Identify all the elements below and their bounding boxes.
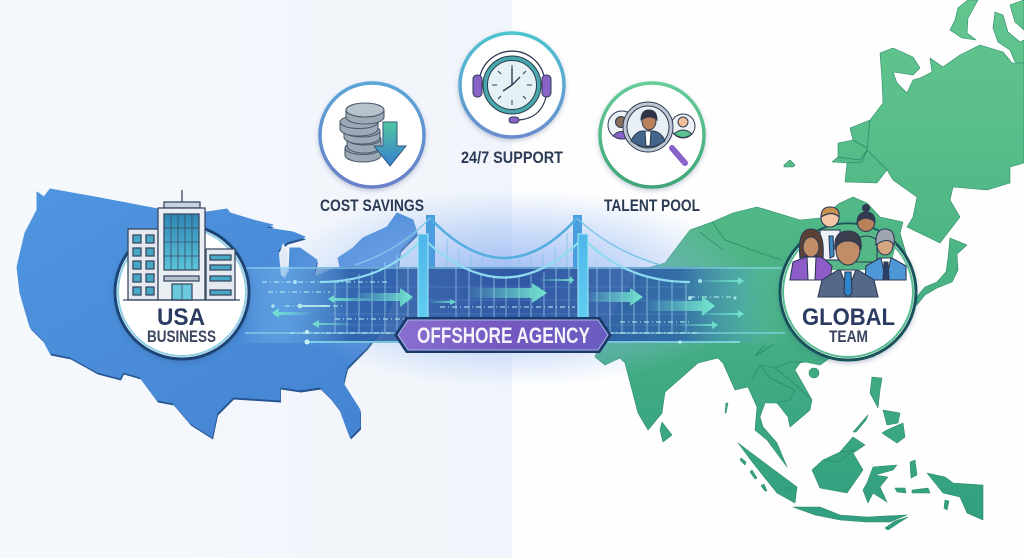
lake michigan — [279, 243, 288, 278]
icon: magnifier and candidates — [608, 102, 695, 163]
small islands — [895, 488, 906, 493]
front left person — [790, 229, 832, 280]
Java and lesser Sunda — [793, 507, 907, 522]
back towers and back cables — [355, 215, 660, 270]
Borneo — [812, 437, 865, 493]
Sulawesi — [863, 465, 897, 503]
front cables — [423, 238, 583, 278]
offshore agency badge — [394, 317, 612, 353]
label: business: BUSINESS — [147, 328, 216, 346]
Hainan — [809, 368, 819, 378]
Papua — [927, 473, 983, 520]
Sumatra — [738, 443, 797, 503]
back right person — [855, 204, 877, 262]
flow arrows left — [272, 295, 373, 328]
northern islands — [950, 0, 978, 40]
icon: team of people — [790, 204, 906, 297]
ring — [460, 33, 564, 137]
front towers — [418, 234, 428, 318]
badge circle — [115, 225, 249, 359]
panel: 24/7 support — [460, 33, 564, 167]
ring — [600, 83, 704, 187]
offshore agency badge: OFFSHORE AGENCY — [417, 323, 590, 348]
Sri Lanka — [660, 422, 672, 442]
label: 24/7 SUPPORT — [461, 149, 563, 167]
badge circle — [780, 224, 916, 360]
label: USA: USA — [157, 304, 205, 331]
ring — [320, 83, 424, 187]
band grid lines — [335, 247, 686, 333]
data dots — [271, 279, 736, 344]
label: COST SAVINGS — [320, 197, 424, 215]
right person — [865, 229, 906, 280]
panel: USA business badge — [115, 190, 249, 359]
map: USA — [17, 189, 418, 440]
panel: global team badge — [780, 204, 916, 360]
icon: office buildings — [123, 190, 240, 300]
dotted data streams — [262, 282, 735, 333]
Russia and Europe landmass — [832, 45, 1024, 243]
label: TALENT POOL — [604, 197, 700, 215]
Japan — [916, 238, 967, 305]
icon: coins and down arrow — [340, 103, 384, 162]
map: Asia — [595, 0, 1024, 530]
front center person — [818, 231, 878, 297]
flow arrows right — [357, 276, 744, 329]
glow behind bridge — [262, 188, 762, 388]
panel: talent pool — [600, 83, 704, 215]
icon: clock with headset — [473, 51, 551, 123]
iceland-like island — [784, 160, 795, 167]
data band — [240, 267, 790, 343]
country borders — [700, 120, 887, 403]
Central and South Asia with India and Indochina — [595, 197, 917, 467]
Philippines — [870, 377, 882, 408]
label: team: TEAM — [829, 328, 868, 346]
label: global: GLOBAL — [802, 304, 895, 331]
panel: cost savings — [320, 83, 424, 215]
bridge and data band — [240, 215, 790, 344]
back left person — [820, 207, 840, 260]
